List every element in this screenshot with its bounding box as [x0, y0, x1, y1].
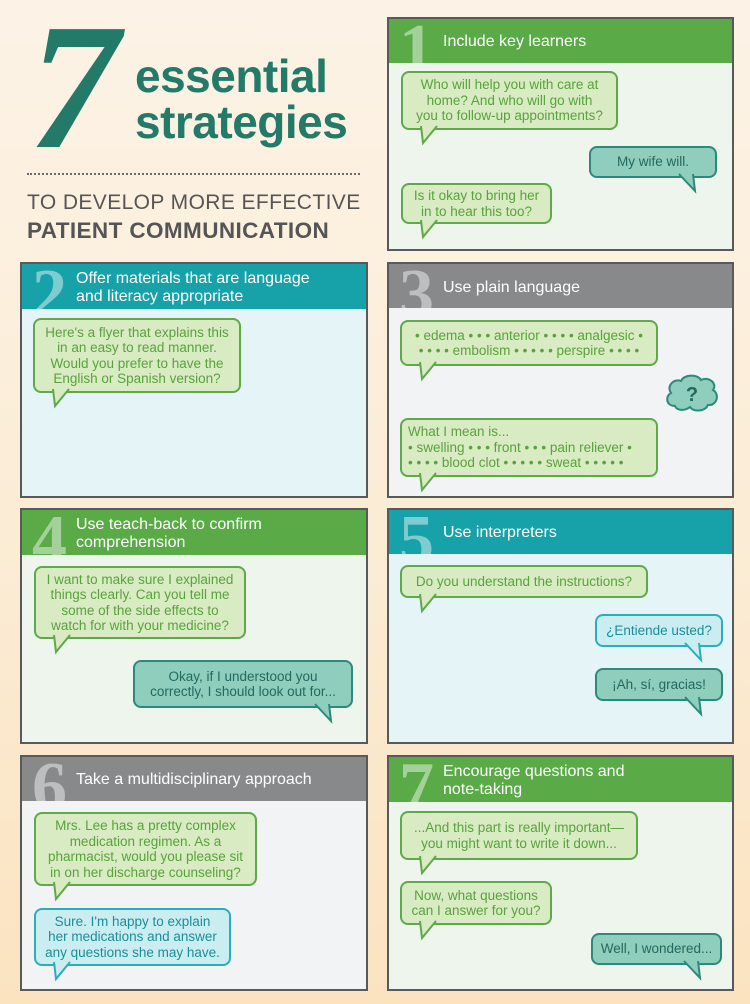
bubble: sure: her medications and answer: [48, 929, 217, 944]
bubble: important: [400, 811, 638, 860]
bubble: gracias: ¡Ah, sí, gracias!: [612, 677, 706, 692]
bubble: understand: Do you understand the instructions?: [416, 574, 632, 589]
bubble: Mrs. Lee: Mrs. Lee has a pretty complex: [55, 818, 236, 833]
header 7: Encourage questions and: [443, 763, 624, 780]
title words: essential: [135, 50, 327, 102]
header 1: [389, 19, 732, 63]
header 4: comprehension: [76, 534, 185, 551]
header 3: [389, 264, 732, 308]
bubble: bring her: Is it okay to bring her: [414, 188, 539, 203]
panel 4: teach-back: [20, 508, 368, 744]
bubble: plain words: What I mean is...: [408, 424, 509, 439]
bubble: who will help: home? And who will go with: [427, 93, 592, 108]
bubble: my wife will: My wife will.: [617, 154, 689, 169]
title words: strategies: [135, 96, 347, 148]
bubble: bring her: in to hear this too?: [421, 204, 532, 218]
bubble: Mrs. Lee: medication regimen. As a: [70, 834, 221, 848]
bubble: look out for: [133, 660, 353, 708]
title: [27, 0, 361, 243]
bubble: plain words: • swelling • • • front • • • pain reliever •: [408, 440, 632, 455]
bubble: plain words: [400, 418, 658, 477]
bubble: what questions: [400, 881, 552, 925]
bubble: explained clearly: I want to make sure I explained: [47, 572, 233, 586]
bubble: sure: any questions she may have.: [45, 945, 220, 960]
bubble: sure: [34, 908, 231, 966]
panel 6: multidisciplinary: [20, 755, 368, 991]
header 4: [22, 510, 366, 555]
header 2: Offer materials that are language: [76, 270, 310, 287]
bubble: wondered: Well, I wondered...: [601, 941, 712, 956]
header 2: [22, 264, 366, 309]
bubble: who will help: [401, 71, 618, 130]
bubble: entiende: ¿Entiende usted?: [606, 623, 712, 638]
bubble: gracias: [595, 668, 723, 701]
icon: question cloud: ?: [686, 384, 698, 406]
bubble: look out for: Okay, if I understood you: [168, 668, 318, 684]
header 7: [389, 757, 732, 802]
panel 3: plain language: [387, 262, 734, 498]
bubble: entiende: [595, 614, 723, 647]
bubble: important: ...And this part is really important—: [414, 820, 624, 835]
header 5: [389, 510, 732, 554]
subtitle: TO DEVELOP MORE EFFECTIVE: [27, 191, 361, 214]
bubble: understand: [400, 565, 648, 598]
subtitle: [27, 191, 361, 243]
header 3: Use plain language: [443, 279, 580, 296]
bubble: flyer: Here's a flyer that explains this: [45, 324, 229, 340]
panel 5: interpreters: [387, 508, 734, 744]
bubble: flyer: Would you prefer to have the: [50, 356, 224, 370]
bubble: bring her: [401, 183, 552, 224]
header 7: note-taking: [443, 781, 522, 798]
bubble: jargon: • • • • embolism • • • • • perspire • • • •: [419, 343, 639, 358]
panel 2: materials: [20, 262, 368, 498]
title words: [135, 50, 347, 148]
bubble: Mrs. Lee: pharmacist, would you please sit: [48, 849, 243, 864]
bubble: Mrs. Lee: [34, 812, 257, 886]
bubble: flyer: English or Spanish version?: [53, 371, 221, 386]
bubble: who will help: you to follow-up appointments?: [416, 108, 603, 123]
bubble: look out for: correctly, I should look out for...: [150, 684, 336, 699]
panel 1: include key learners: [387, 17, 734, 251]
bubble: jargon: [400, 320, 658, 366]
header 5: Use interpreters: [443, 524, 557, 541]
bubble: flyer: [33, 318, 241, 393]
bubble: Mrs. Lee: in on her discharge counseling?: [50, 864, 241, 880]
bubble: explained clearly: things clearly. Can you tell me: [50, 587, 230, 602]
bubble: what questions: can I answer for you?: [411, 903, 541, 918]
header 2: and literacy appropriate: [76, 288, 243, 305]
header 6: [22, 757, 366, 801]
bubble: who will help: Who will help you with care at: [421, 77, 598, 92]
bubble: sure: Sure. I'm happy to explain: [55, 914, 210, 929]
panel 7: questions: [387, 755, 734, 991]
bubble: my wife will: [589, 146, 717, 178]
bubble: explained clearly: some of the side effects to: [61, 602, 219, 618]
bubble: wondered: [591, 933, 722, 965]
subtitle: PATIENT COMMUNICATION: [27, 218, 329, 243]
bubble: explained clearly: watch for with your medicine?: [51, 618, 229, 633]
bubble: jargon: • edema • • • anterior • • • • analgesic •: [415, 328, 643, 342]
bubble: plain words: • • • • blood clot • • • • • sweat • • • • •: [408, 455, 624, 470]
bubble: what questions: Now, what questions: [414, 888, 538, 902]
bubble: explained clearly: [34, 566, 246, 639]
header 1: Include key learners: [443, 33, 586, 50]
header 6: Take a multidisciplinary approach: [76, 771, 312, 788]
bubble: flyer: in an easy to read manner.: [57, 340, 217, 355]
bubble: important: you might want to write it down...: [421, 836, 617, 850]
icon: question cloud: [666, 374, 718, 412]
header 4: Use teach-back to confirm: [76, 516, 262, 533]
